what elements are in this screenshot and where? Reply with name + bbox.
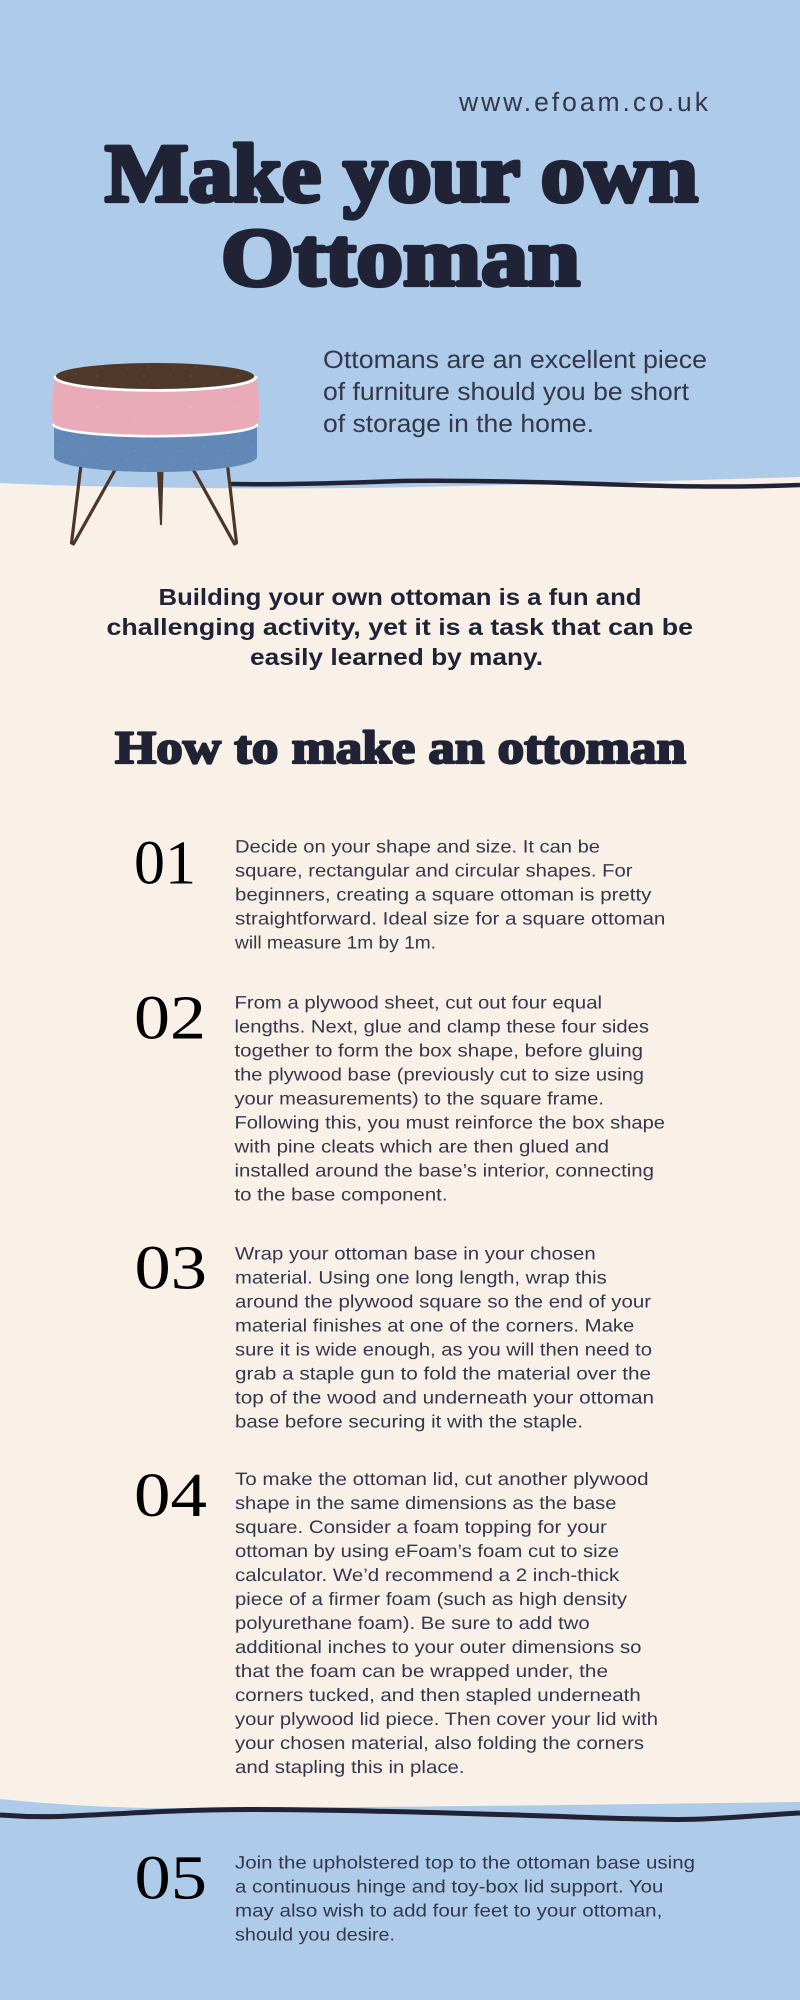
step 04 text: and stapling this in place. bbox=[235, 1757, 465, 1777]
step 01 number: 01 bbox=[134, 830, 196, 898]
step 04 text: your plywood lid piece. Then cover your lid with bbox=[235, 1709, 658, 1729]
step 03 text: Wrap your ottoman base in your chosen bbox=[235, 1243, 596, 1263]
background: top blue header bbox=[0, 0, 800, 488]
step 04 text: calculator. We’d recommend a 2 inch-thick bbox=[235, 1565, 620, 1585]
step 02 text: your measurements) to the square frame. bbox=[234, 1088, 604, 1108]
step 02 text bbox=[233, 992, 665, 1204]
website url: www.efoam.co.uk bbox=[458, 87, 709, 117]
icon: ottoman stool bbox=[52, 363, 259, 544]
bold lead paragraph: easily learned by many. bbox=[250, 644, 543, 670]
step 04 text: To make the ottoman lid, cut another plywood bbox=[235, 1469, 649, 1489]
title: Make your own bbox=[105, 127, 698, 219]
step 01 text: beginners, creating a square ottoman is pretty bbox=[235, 885, 651, 905]
step 05 number: 05 bbox=[134, 1844, 207, 1912]
wavy divider: bottom bbox=[0, 1810, 800, 1820]
wavy divider: top bbox=[231, 481, 800, 487]
step 05 text: Join the upholstered top to the ottoman base using bbox=[235, 1852, 695, 1872]
step 01 text: will measure 1m by 1m. bbox=[234, 933, 436, 953]
stool pink cushion bbox=[52, 377, 259, 437]
step 01 text: square, rectangular and circular shapes. For bbox=[235, 861, 632, 881]
step 02 text: to the base component. bbox=[234, 1184, 448, 1204]
step 03 number: 03 bbox=[134, 1234, 207, 1302]
step 02 text: From a plywood sheet, cut out four equal bbox=[234, 992, 602, 1012]
step 02 text: with pine cleats which are then glued and bbox=[233, 1136, 609, 1156]
stool white trims bbox=[54, 377, 257, 436]
step 04 text: ottoman by using eFoam’s foam cut to size bbox=[235, 1541, 619, 1561]
title: Ottoman bbox=[221, 211, 580, 303]
step 04 text: shape in the same dimensions as the base bbox=[235, 1493, 616, 1513]
stool dark top bbox=[56, 363, 254, 389]
step 02 text: lengths. Next, glue and clamp these four sides bbox=[234, 1016, 649, 1036]
step 03 text bbox=[235, 1243, 654, 1431]
step 03 text: base before securing it with the staple. bbox=[235, 1411, 583, 1431]
bold lead paragraph: challenging activity, yet it is a task that can be bbox=[106, 614, 693, 640]
title bbox=[105, 127, 698, 303]
background: bottom blue footer bbox=[0, 1799, 800, 2000]
step 04 text: additional inches to your outer dimensions so bbox=[235, 1637, 641, 1657]
step 03 text: grab a staple gun to fold the material over the bbox=[235, 1363, 651, 1383]
step 03 text: material finishes at one of the corners. Make bbox=[235, 1315, 634, 1335]
step 05 text bbox=[235, 1852, 695, 1944]
step 04 text: piece of a firmer foam (such as high density bbox=[235, 1589, 627, 1609]
step 01 text: Decide on your shape and size. It can be bbox=[235, 837, 600, 857]
step 03 text: sure it is wide enough, as you will then need to bbox=[235, 1339, 652, 1359]
step 04 text: polyurethane foam). Be sure to add two bbox=[235, 1613, 590, 1633]
stool legs bbox=[72, 465, 236, 544]
step 05 text: should you desire. bbox=[235, 1924, 395, 1944]
step 03 bbox=[134, 1234, 654, 1431]
step 02 text: Following this, you must reinforce the box shape bbox=[234, 1112, 665, 1132]
stool blue base bbox=[54, 420, 257, 472]
step 01 text: straightforward. Ideal size for a square ottoman bbox=[235, 909, 665, 929]
step 03 text: top of the wood and underneath your ottoman bbox=[235, 1387, 654, 1407]
step 01 text bbox=[234, 837, 665, 953]
intro text bbox=[323, 346, 707, 438]
bold lead paragraph bbox=[106, 584, 693, 670]
step 04 number: 04 bbox=[134, 1462, 207, 1530]
step 05 bbox=[134, 1844, 695, 1944]
section heading: How to make an ottoman bbox=[115, 722, 686, 774]
step 04 text: corners tucked, and then stapled underneath bbox=[235, 1685, 641, 1705]
step 04 bbox=[134, 1462, 658, 1777]
step 02 text: installed around the base’s interior, connecting bbox=[234, 1160, 654, 1180]
step 03 text: material. Using one long length, wrap this bbox=[235, 1267, 607, 1287]
intro text: of storage in the home. bbox=[323, 410, 594, 438]
intro text: of furniture should you be short bbox=[323, 378, 689, 406]
step 02 bbox=[134, 984, 665, 1204]
step 04 text: that the foam can be wrapped under, the bbox=[235, 1661, 608, 1681]
step 02 number: 02 bbox=[134, 984, 206, 1052]
bold lead paragraph: Building your own ottoman is a fun and bbox=[158, 584, 642, 610]
step 04 text: your chosen material, also folding the corners bbox=[235, 1733, 644, 1753]
step 04 text: square. Consider a foam topping for your bbox=[235, 1517, 607, 1537]
step 05 text: may also wish to add four feet to your ottoman, bbox=[235, 1900, 662, 1920]
step 02 text: together to form the box shape, before gluing bbox=[234, 1040, 643, 1060]
step 03 text: around the plywood square so the end of your bbox=[235, 1291, 651, 1311]
step 04 text bbox=[235, 1469, 658, 1777]
intro text: Ottomans are an excellent piece bbox=[323, 346, 707, 374]
step 05 text: a continuous hinge and toy-box lid support. You bbox=[235, 1876, 663, 1896]
step 01 bbox=[134, 830, 665, 953]
step 02 text: the plywood base (previously cut to size using bbox=[234, 1064, 644, 1084]
